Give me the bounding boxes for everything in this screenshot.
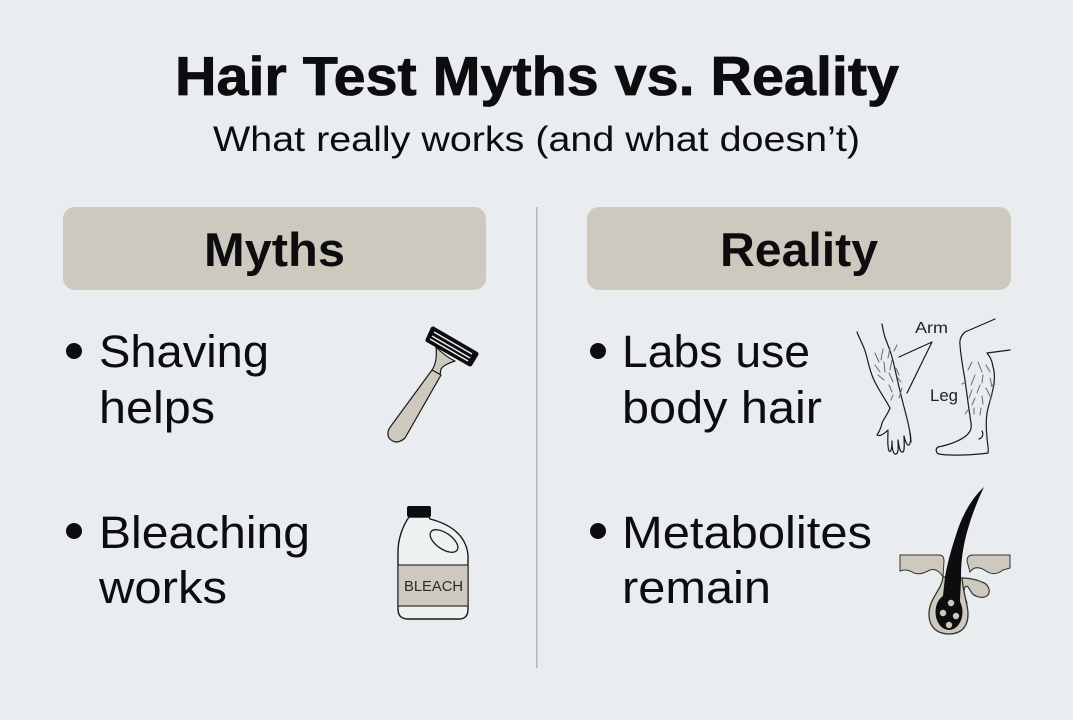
reality: labs use body hair: body hair — [622, 382, 822, 433]
myth: bleaching works: works — [98, 562, 227, 613]
panel: reality — [587, 207, 1011, 634]
myth: shaving helps: helps — [99, 382, 215, 433]
myth: shaving helps — [66, 326, 269, 433]
subtitle: What really works (and what doesn’t) — [213, 120, 860, 159]
label: leg: Leg — [930, 386, 958, 405]
myth: bleaching works: Bleaching — [99, 507, 310, 558]
icon: bleach bottle — [398, 506, 468, 619]
reality: metabolites remain: remain — [622, 562, 771, 613]
reality: metabolites remain: Metabolites — [622, 507, 872, 558]
icon: razor — [388, 329, 476, 442]
icon: hair follicle — [900, 487, 1010, 634]
heading: reality — [587, 207, 1011, 290]
myth: shaving helps: Shaving — [99, 326, 269, 377]
panel: myths — [63, 207, 486, 619]
reality: metabolites remain — [590, 507, 872, 613]
myth: bleaching works — [66, 507, 310, 613]
label: arm: Arm — [915, 320, 948, 337]
icon: bleach bottle: BLEACH — [404, 578, 463, 595]
title: Hair Test Myths vs. Reality — [175, 45, 899, 107]
reality: labs use body hair — [590, 326, 822, 433]
icon: arm and leg diagram — [857, 319, 1010, 455]
heading: reality: Reality — [720, 223, 878, 276]
reality: labs use body hair: Labs use — [622, 326, 810, 377]
heading: myths — [63, 207, 486, 290]
heading: myths: Myths — [204, 223, 345, 276]
